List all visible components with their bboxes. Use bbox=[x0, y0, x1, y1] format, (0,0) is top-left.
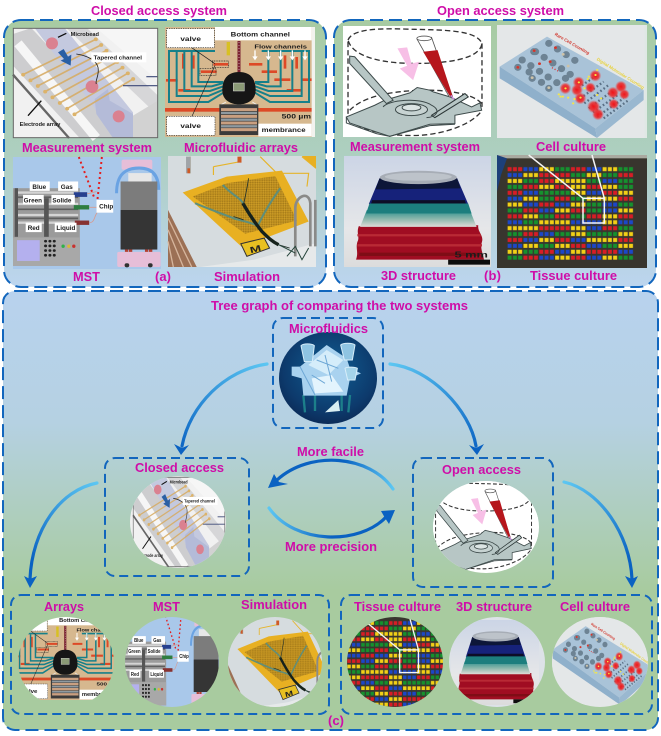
label: measurement system: Measurement system bbox=[350, 139, 480, 154]
image: microfluidic chip bbox=[279, 332, 377, 424]
image: closed measurement system bbox=[12, 28, 158, 141]
thumbnail: simulation: M bbox=[284, 690, 294, 699]
heading: tree graph: Tree graph of comparing the two systems bbox=[211, 298, 468, 313]
image: closed measurement system: Microbead bbox=[71, 32, 99, 38]
label: panel b: (b) bbox=[484, 268, 501, 283]
arrow: open access to its applications bbox=[564, 482, 638, 588]
image: MST setup: Chip bbox=[99, 203, 113, 210]
image: leaf simulation bbox=[167, 156, 317, 268]
thumbnail: arrays: Bottom channel bbox=[59, 618, 103, 624]
thumbnail: cell culture: Digital Molecular Counting bbox=[619, 642, 654, 668]
image: closed measurement system: Electrode array bbox=[20, 122, 61, 128]
thumbnail: MST: Solide bbox=[148, 649, 161, 655]
label: MST: MST bbox=[73, 269, 100, 284]
image: microfluidic arrays chip: Bottom channel bbox=[231, 31, 290, 38]
image: MST setup bbox=[13, 156, 161, 269]
thumbnail: arrays: valve bbox=[22, 622, 38, 628]
image: closed access thumbnail: Microbead bbox=[170, 479, 188, 485]
thumbnail: MST: Chip bbox=[179, 654, 189, 660]
label: more facile: More facile bbox=[297, 444, 364, 459]
label: microfluidics: Microfluidics bbox=[289, 321, 368, 336]
thumbnail: cell culture: Rare Cell Counting bbox=[590, 622, 616, 641]
image: closed access thumbnail: Electrode array bbox=[137, 553, 163, 558]
image: MST setup: Solide bbox=[52, 197, 72, 204]
image: MST setup: Red bbox=[28, 225, 40, 232]
label: more precision: More precision bbox=[285, 539, 377, 554]
thumbnail: arrays: 500 µm bbox=[97, 681, 118, 687]
arrow: microfluidics to open access bbox=[390, 364, 484, 455]
image: microfluidic arrays chip: 500 µm bbox=[282, 114, 311, 120]
thumbnail: MST: Red bbox=[131, 671, 139, 678]
thumbnail: MST bbox=[121, 616, 221, 708]
image: microfluidic arrays chip: valve bbox=[180, 123, 201, 130]
thumbnail: tissue culture bbox=[347, 617, 443, 707]
group: closed access applications bbox=[11, 595, 332, 714]
label: open access: Open access bbox=[442, 462, 521, 477]
arrow: more precision bbox=[269, 508, 395, 537]
image: microfluidic arrays chip: membrance bbox=[262, 127, 306, 134]
label: simulation: Simulation bbox=[241, 597, 307, 612]
label: closed access: Closed access bbox=[135, 460, 224, 475]
panel: open access system bbox=[334, 3, 656, 287]
group: open access applications bbox=[324, 595, 655, 714]
thumbnail: arrays: membrance bbox=[82, 692, 114, 698]
label: cell culture: Cell culture bbox=[560, 599, 630, 614]
node: open access bbox=[413, 458, 553, 587]
label: MST: MST bbox=[153, 599, 180, 614]
panel: closed access system bbox=[4, 3, 326, 287]
thumbnail: 3D structure bbox=[448, 615, 546, 710]
arrow: more facile bbox=[268, 460, 393, 489]
label: cell culture: Cell culture bbox=[536, 139, 606, 154]
image: closed access thumbnail bbox=[130, 476, 226, 568]
image: MST setup: Blue bbox=[32, 184, 47, 191]
label: tissue culture: Tissue culture bbox=[530, 268, 617, 283]
image: MST setup: Gas bbox=[61, 184, 73, 191]
thumbnail: MST: Gas bbox=[153, 638, 162, 644]
image: open access thumbnail bbox=[430, 480, 542, 574]
arrow: closed access to its applications bbox=[24, 483, 97, 588]
image: microfluidic arrays chip: valve bbox=[180, 36, 201, 43]
arrow: microfluidics to closed access bbox=[174, 364, 267, 455]
label: tissue culture: Tissue culture bbox=[354, 599, 441, 614]
thumbnail: MST: Green bbox=[128, 649, 141, 655]
node: microfluidics bbox=[273, 318, 385, 428]
thumbnail: MST: Liquid bbox=[150, 671, 163, 678]
image: microfluidic arrays chip: Flow channels bbox=[254, 45, 307, 51]
image: 3D printed structure: 5 mm bbox=[455, 251, 488, 260]
image: microfluidic arrays chip bbox=[165, 27, 315, 137]
label: 3D structure: 3D structure bbox=[381, 268, 456, 283]
image: cell culture plate: Rare Cell Counting bbox=[554, 32, 591, 56]
heading: open access system: Open access system bbox=[437, 3, 564, 18]
image: MST setup: Green bbox=[24, 197, 42, 204]
node: closed access bbox=[105, 458, 249, 576]
image: closed measurement system: Tapered channel bbox=[94, 55, 143, 61]
image: tissue culture array bbox=[497, 154, 647, 268]
thumbnail: arrays: valve bbox=[22, 689, 38, 695]
image: leaf simulation: M bbox=[249, 243, 262, 255]
thumbnail: MST: Blue bbox=[134, 638, 144, 644]
label: 3D structure: 3D structure bbox=[456, 599, 532, 614]
thumbnail: arrays bbox=[18, 617, 114, 700]
label: panel a: (a) bbox=[155, 269, 171, 284]
image: cell culture plate bbox=[497, 25, 647, 138]
thumbnail: arrays: Flow channels bbox=[77, 628, 116, 633]
panel: tree graph comparison bbox=[3, 291, 658, 730]
label: arrays: Arrays bbox=[44, 599, 84, 614]
label: measurement system: Measurement system bbox=[22, 140, 152, 155]
image: cell culture plate: Digital Molecular Counting bbox=[596, 57, 645, 90]
heading: closed access system: Closed access system bbox=[91, 3, 227, 18]
image: closed access thumbnail: Tapered channel bbox=[184, 498, 215, 504]
image: open measurement system bbox=[343, 26, 491, 137]
label: microfluidic arrays: Microfluidic arrays bbox=[184, 140, 298, 155]
image: MST setup: Liquid bbox=[56, 225, 76, 232]
label: panel c: (c) bbox=[328, 713, 344, 728]
thumbnail: cell culture bbox=[552, 617, 648, 707]
image: 3D printed structure bbox=[344, 156, 491, 267]
thumbnail: simulation bbox=[228, 617, 322, 707]
label: simulation: Simulation bbox=[214, 269, 280, 284]
